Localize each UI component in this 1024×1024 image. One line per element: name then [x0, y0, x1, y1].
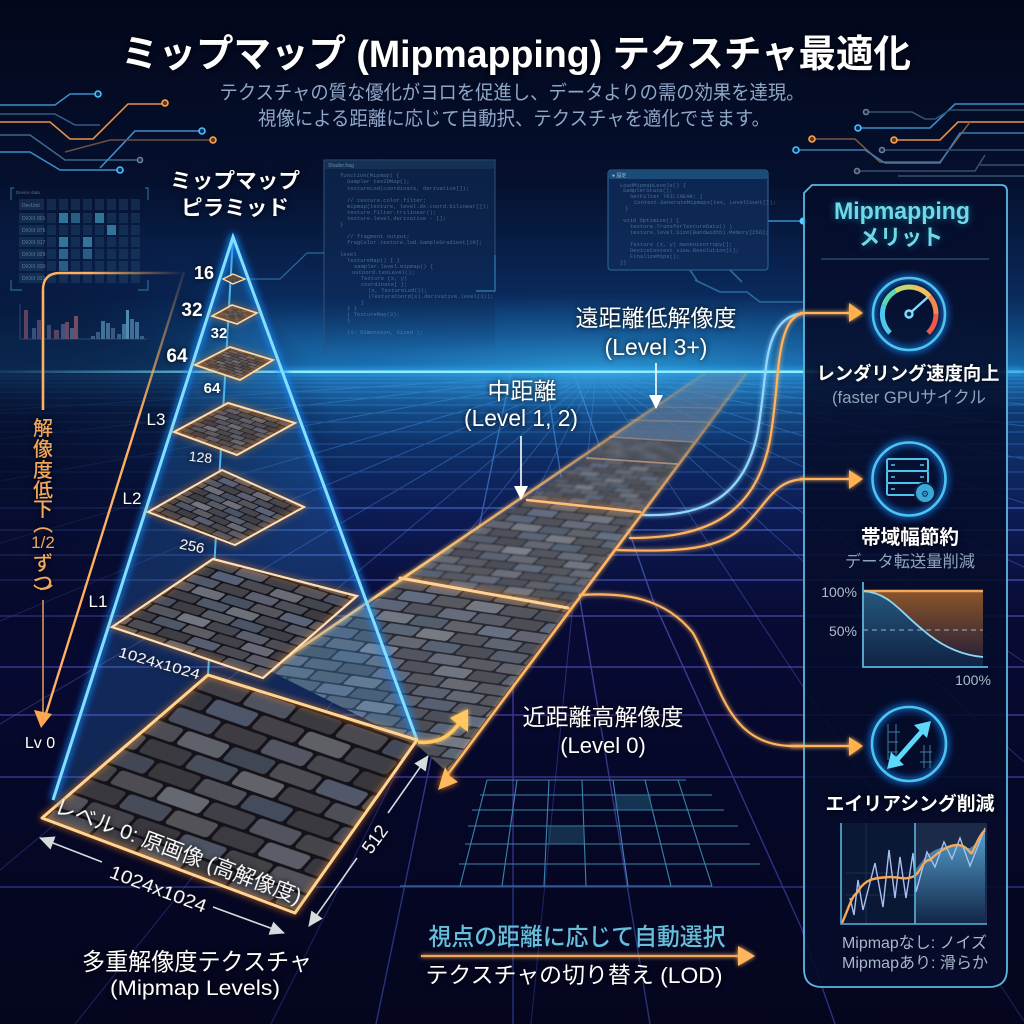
dimension arrows for level 0: [40, 756, 428, 933]
LOD arrow: [421, 946, 755, 966]
level 5 tile: 32: [212, 305, 257, 324]
panel heading: Mipmapping: [834, 198, 970, 225]
small floor grid: [400, 780, 760, 886]
benefit 2 text: 帯域幅節約: [861, 526, 959, 549]
automatic LOD selection: テクスチャの切り替え (LOD): [426, 963, 722, 988]
code panel: right: ● 設定: [612, 172, 626, 179]
arrow to mid road: [520, 436, 522, 499]
left data heatmap panel: DXXX 001: [22, 216, 46, 222]
code panel: centre background: TextureMap() { }: [347, 257, 400, 264]
level 3 tile: [174, 403, 295, 455]
road edges: [268, 373, 747, 778]
circuit traces right: [690, 104, 1024, 302]
road segment: far end: [610, 373, 747, 442]
connector curves from road to benefits: [580, 313, 850, 746]
mipmap pyramid: [42, 237, 417, 913]
arrow to far road: [655, 363, 657, 408]
code panel: centre background: level: [340, 251, 357, 258]
pyramid size labels: 32: [181, 300, 203, 321]
pyramid size labels: 64: [166, 346, 188, 367]
road level dividers: [400, 407, 717, 608]
code panel: centre background: [324, 160, 495, 353]
bandwidth chart: 50%: [829, 623, 857, 639]
near distance label: [522, 704, 684, 758]
road: receding texture strip: [268, 373, 747, 778]
pyramid size labels: L1: [89, 592, 107, 611]
pyramid heading: [170, 170, 300, 220]
code panel: centre background: (x, TextureLod());: [368, 287, 427, 294]
left bar chart: [20, 304, 147, 339]
pyramid edges: [53, 237, 417, 800]
panel: mipmapping benefits: データ転送量削減: [845, 551, 975, 571]
code panel: centre background: coordinate[ ];: [361, 281, 407, 288]
vertical label: resolution decrease: ず: [33, 552, 53, 575]
code panel: right: DeviceContext view.Resolution[1];: [630, 247, 739, 254]
pyramid translucent volume: [53, 237, 417, 913]
far distance label: (Level 3+): [605, 334, 707, 360]
benefit 3 text: エイリアシング削減: [826, 792, 994, 815]
vertical label: resolution decrease: ︶: [33, 583, 53, 606]
panel: mipmapping benefits: (faster GPUサイクル: [832, 388, 986, 407]
pyramid size labels: 64: [204, 380, 221, 397]
code panel: centre background: texture.level.derivative - [];: [347, 215, 446, 222]
code panel: centre background: uvCoord.texLevel();: [352, 269, 415, 276]
aliasing chart legend: Mipmapなし: ノイズ: [842, 934, 987, 952]
curved yellow arrow from pyramid to road: [418, 709, 468, 742]
far distance label: [576, 305, 736, 408]
left data heatmap panel: DXXX 029: [22, 252, 46, 258]
pyramid heading: ピラミッド: [181, 197, 289, 220]
pyramid axis: [208, 237, 233, 675]
bandwidth chart: 100%: [821, 584, 857, 600]
benefit 1 text: レンダリング速度向上: [816, 363, 1000, 384]
level 2 tile: [148, 470, 304, 545]
level 0 height label: 512: [358, 821, 392, 858]
code panel: right: void Optimize() {: [623, 217, 679, 224]
vertical label: resolution decrease: ︵: [33, 514, 53, 536]
vertical label: resolution decrease: つ: [33, 573, 53, 595]
near distance label: 近距離高解像度: [522, 704, 684, 730]
code panel: centre background: }: [340, 221, 343, 228]
multi-resolution caption: (Mipmap Levels): [110, 977, 280, 1000]
pyramid to code connector: [250, 253, 324, 279]
panel: mipmapping benefits: [804, 185, 1007, 987]
code panel: centre background: texture.filter.trilinear();: [347, 209, 436, 216]
road lightening overlay: [268, 373, 747, 772]
pyramid heading: ミップマップ: [170, 170, 300, 193]
vertical label: resolution decrease: 解: [33, 417, 53, 440]
left data heatmap panel: DevUnit: [22, 203, 40, 209]
code panel: right: texture.level.Size(Bandwidth).Memory[256];: [630, 229, 769, 236]
code panel: right: LoadMipmapLevels() {: [620, 182, 686, 189]
vertical label: resolution decrease: 下: [33, 499, 53, 521]
code panel: right: }}: [620, 259, 627, 266]
automatic LOD selection: [421, 924, 755, 988]
left data heatmap panel: DXXX 030: [22, 264, 46, 270]
code panel: right: FinalizeMips();: [630, 253, 680, 260]
level 6 tile: 16: [223, 274, 245, 284]
pyramid size labels: 128: [188, 448, 213, 466]
pyramid size labels: [25, 263, 227, 752]
road segment: level 1: [400, 500, 640, 608]
road segment: near level 0: [268, 578, 568, 772]
icon: server bandwidth: [872, 442, 946, 516]
middle distance label: 中距離: [488, 378, 556, 404]
level 0 tile: [42, 675, 417, 913]
code panel: centre background: }: [347, 317, 350, 324]
left data heatmap panel: DXXX 031: [22, 276, 46, 282]
automatic LOD selection: 視点の距離に応じて自動選択: [428, 924, 726, 951]
icon: server bandwidth: ⚙: [921, 489, 929, 499]
subtitle: テクスチャの質な優化がヨロを促進し、データよりの需の効果を達現。: [220, 82, 804, 104]
middle distance label: (Level 1, 2): [464, 405, 578, 431]
code panel: centre background: fragColor.texture.lod.SampleGradient[10];: [347, 239, 482, 246]
vertical label: resolution decrease: 1/2: [31, 533, 55, 552]
pyramid size labels: 256: [178, 536, 206, 558]
level 0 label on tile: レベル 0: 原画像 (高解像度): [51, 795, 305, 909]
road segment: level 2: [527, 458, 677, 512]
code panel: centre background: function(Mipmap) {: [340, 172, 399, 179]
pyramid size labels: 1024x1024: [117, 644, 202, 683]
code panel: centre background: mipmap(texture, level.dx.coord.bilinear[]);: [347, 203, 489, 210]
code panel: centre background: textureLod(coordinate, derivative[]);: [347, 185, 469, 192]
vertical label: resolution decrease: 低: [33, 479, 53, 502]
code panel: centre background: } }: [347, 305, 357, 312]
bandwidth chart: [821, 582, 991, 688]
code panel: centre background: // texture.color.filter;: [347, 197, 426, 204]
aliasing chart legend: [842, 934, 988, 972]
code panel: centre background: sampler.level.mipmap() {: [354, 263, 433, 270]
pyramid size labels: Lv 0: [25, 735, 55, 752]
resolution decrease arrow: [34, 272, 184, 728]
road segment: level 3: [587, 437, 693, 464]
left data heatmap panel: Device data: [16, 190, 40, 195]
circuit traces left: [0, 91, 216, 173]
code panel: centre background: // fragment output;: [347, 233, 410, 240]
pyramid size labels: L2: [123, 489, 141, 508]
panel heading: メリット: [859, 225, 943, 250]
multi-resolution caption: [82, 949, 312, 1000]
code panel: centre background: ( TextureMap(3);: [347, 311, 400, 318]
code panel: right: texture.TransferTextureData() ): [630, 223, 732, 230]
code panel: centre background: }: [361, 299, 364, 306]
level 1 tile: [112, 559, 357, 678]
aliasing chart: [841, 823, 987, 924]
pyramid size labels: 16: [194, 263, 214, 283]
pyramid size labels: L3: [147, 410, 165, 429]
connector extensions and arrowheads onto panel: [790, 303, 863, 756]
title: ミップマップ (Mipmapping) テクスチャ最適化: [121, 34, 911, 76]
double arrow head at road near end: [438, 767, 458, 790]
icon: speed gauge: [873, 278, 945, 350]
panel heading: [834, 198, 970, 250]
left data heatmap panel: [11, 188, 148, 290]
code panel: centre background: Texture (x, y): [361, 275, 407, 282]
middle distance label: [464, 378, 578, 499]
vertical label: resolution decrease: 度: [33, 459, 53, 482]
left data heatmap panel: DXXX 017: [22, 240, 46, 246]
far distance label: 遠距離低解像度: [576, 305, 736, 331]
code panel: right: }: [625, 205, 628, 212]
subtitle: [220, 82, 804, 130]
multi-resolution caption: 多重解像度テクスチャ: [82, 949, 312, 976]
code panel: right: Texture (x, y) maxAnisotropy[];: [630, 241, 732, 248]
vertical label: resolution decrease: 像: [33, 438, 53, 461]
left data heatmap panel: DXXX 076: [22, 228, 46, 234]
code panel: right: [608, 170, 776, 270]
near distance label: (Level 0): [560, 733, 646, 758]
bandwidth chart: 100%: [955, 672, 991, 688]
code panel: centre background: Sampler tex2DMap();: [347, 178, 410, 185]
code panel: centre background: (1: Dimension, Sized );: [347, 329, 423, 336]
subtitle: 視像による距離に応じて自動択、テクスチャを適化できます。: [258, 108, 770, 130]
aliasing chart legend: Mipmapあり: 滑らか: [842, 954, 988, 972]
code panel: centre background: (TextureCoord(x).derivative.level(1));: [368, 293, 493, 300]
level 0 width label: 1024x1024: [107, 862, 209, 917]
pyramid size labels: 32: [211, 325, 227, 342]
level 4 tile: 64: [195, 347, 273, 380]
code panel: right: Context.GenerateMipmaps(tex, LevelCount[]);: [634, 199, 776, 206]
icon: anti-aliasing: [872, 707, 946, 781]
code panel: centre background: Shader.frag: [328, 163, 354, 169]
code panel: right: SamplerState();: [623, 187, 673, 194]
code panel: right: SetFilter TRILINEAR: ]: [630, 193, 703, 200]
